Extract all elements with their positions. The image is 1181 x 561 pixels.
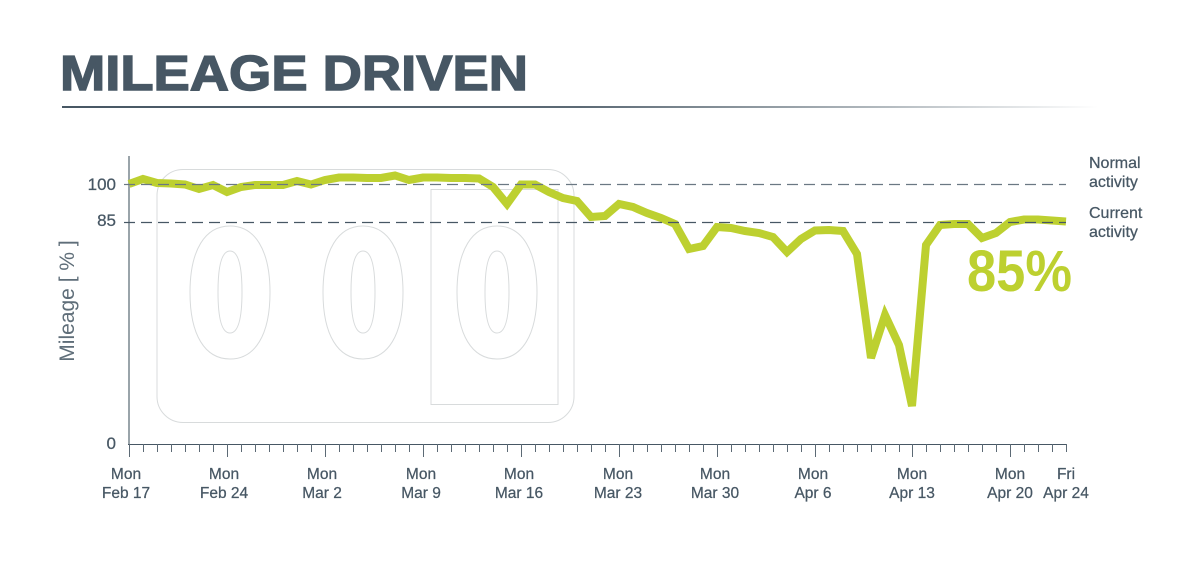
x axis date labels: Mon bbox=[798, 466, 828, 483]
y axis tick labels: 100 bbox=[88, 175, 116, 194]
label: normal activity: activity bbox=[1089, 174, 1138, 191]
y axis tick labels: 0 bbox=[107, 434, 116, 453]
y axis tick labels: 85 bbox=[97, 211, 116, 230]
y axis title: Mileage [ % ] bbox=[56, 240, 79, 362]
x axis date labels: Apr 6 bbox=[794, 485, 832, 502]
reference line: current activity bbox=[124, 222, 1066, 224]
label: current activity: activity bbox=[1089, 224, 1138, 241]
title: MILEAGE DRIVEN bbox=[60, 47, 528, 101]
y axis tick labels bbox=[88, 175, 116, 453]
label: normal activity bbox=[1089, 155, 1141, 191]
x axis date labels: Mon bbox=[897, 466, 927, 483]
label: current activity bbox=[1089, 205, 1143, 241]
label: current activity: Current bbox=[1089, 205, 1143, 222]
mileage line bbox=[129, 176, 1066, 406]
y axis bbox=[128, 156, 130, 444]
x axis date labels: Mar 23 bbox=[594, 485, 642, 502]
title underline bbox=[62, 106, 1098, 108]
watermark: odometer outline bbox=[157, 170, 574, 422]
x axis date labels: Apr 13 bbox=[889, 485, 935, 502]
x axis date labels: Apr 24 bbox=[1043, 485, 1089, 502]
x axis date labels bbox=[102, 466, 1089, 502]
callout: 85%: 85% bbox=[967, 239, 1072, 304]
x axis date labels: Feb 24 bbox=[200, 485, 249, 502]
x axis date labels: Mon bbox=[406, 466, 436, 483]
x axis date labels: Mon bbox=[995, 466, 1025, 483]
x axis date labels: Mon bbox=[111, 466, 141, 483]
x axis date labels: Mar 30 bbox=[691, 485, 739, 502]
x axis date labels: Mon bbox=[307, 466, 337, 483]
x axis date labels: Apr 20 bbox=[987, 485, 1033, 502]
label: normal activity: Normal bbox=[1089, 155, 1141, 172]
x axis with ticks bbox=[128, 444, 1067, 457]
x axis date labels: Mon bbox=[504, 466, 534, 483]
x axis date labels: Mon bbox=[700, 466, 730, 483]
x axis date labels: Mar 16 bbox=[495, 485, 543, 502]
x axis date labels: Mar 2 bbox=[302, 485, 342, 502]
x axis date labels: Fri bbox=[1057, 466, 1075, 483]
x axis date labels: Mon bbox=[603, 466, 633, 483]
x axis date labels: Mar 9 bbox=[401, 485, 441, 502]
reference line: normal activity bbox=[124, 184, 1066, 186]
x axis date labels: Feb 17 bbox=[102, 485, 150, 502]
x axis date labels: Mon bbox=[209, 466, 239, 483]
